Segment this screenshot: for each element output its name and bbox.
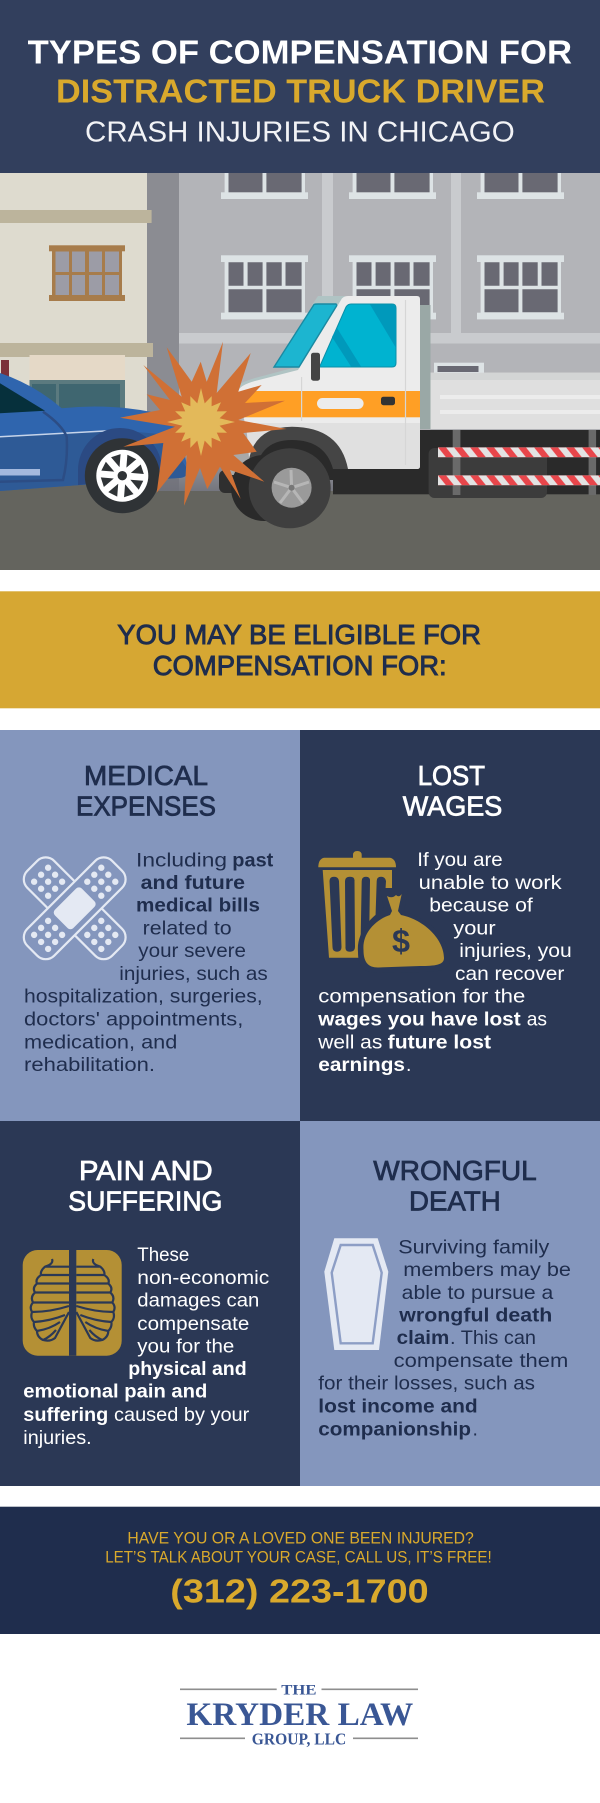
title line 3: CRASH INJURIES IN CHICAGO bbox=[85, 117, 515, 149]
side window bbox=[320, 304, 396, 367]
heading: lost wages: LOST bbox=[418, 760, 485, 791]
panel: lost wages bbox=[300, 730, 600, 1121]
icon: rib cage bbox=[23, 1250, 122, 1356]
heading: medical expenses bbox=[76, 760, 216, 822]
body text: wrongful death: for their losses, such as bbox=[318, 1373, 535, 1395]
call to action panel bbox=[0, 1507, 600, 1634]
body text: pain and suffering: injuries. bbox=[23, 1427, 92, 1449]
body text: pain and suffering: compensate bbox=[137, 1313, 249, 1335]
body text: lost wages: If you are bbox=[417, 849, 503, 871]
logo: the kryder law group: KRYDER LAW bbox=[186, 1697, 413, 1733]
upper windows bbox=[221, 173, 564, 199]
logo: the kryder law group: GROUP, LLC bbox=[252, 1729, 346, 1748]
body text: lost wages: unable to work bbox=[419, 872, 562, 894]
body text: wrongful death: . bbox=[472, 1418, 478, 1440]
heading: pain and suffering: PAIN AND bbox=[79, 1155, 213, 1186]
phone number: (312) 223-1700 bbox=[170, 1574, 429, 1611]
body text: lost wages: because of bbox=[429, 895, 533, 917]
call to action line 1: HAVE YOU OR A LOVED ONE BEEN INJURED? bbox=[127, 1529, 474, 1547]
banner line 1: YOU MAY BE ELIGIBLE FOR bbox=[117, 619, 481, 650]
body text: wrongful death: able to pursue a bbox=[402, 1282, 554, 1304]
body text: lost wages: earnings bbox=[318, 1054, 405, 1076]
car wheel bbox=[85, 438, 160, 513]
body text: lost wages bbox=[317, 849, 572, 1076]
body text: wrongful death: members may be bbox=[403, 1259, 571, 1281]
body text: pain and suffering: caused by your bbox=[114, 1404, 250, 1426]
body text: medical expenses: and future bbox=[141, 872, 245, 894]
body text: wrongful death: . This can bbox=[450, 1327, 536, 1349]
body text: pain and suffering: damages can bbox=[137, 1290, 259, 1312]
title line 2: DISTRACTED TRUCK DRIVER bbox=[56, 72, 545, 110]
body text: pain and suffering: physical and bbox=[128, 1358, 247, 1380]
panel: wrongful death bbox=[300, 1121, 600, 1486]
buildings background bbox=[0, 173, 600, 498]
body text: medical expenses: rehabilitation. bbox=[24, 1054, 155, 1076]
body text: lost wages: can recover bbox=[455, 963, 565, 985]
body text: lost wages: wages you have lost bbox=[317, 1009, 521, 1031]
body text: wrongful death: claim bbox=[397, 1327, 449, 1349]
body text: medical expenses: your severe bbox=[138, 940, 246, 962]
crash illustration bbox=[0, 173, 600, 570]
body text: pain and suffering: These bbox=[137, 1244, 189, 1266]
header panel bbox=[0, 0, 600, 173]
body text: lost wages: injuries, you bbox=[459, 940, 572, 962]
logo: the kryder law group: THE bbox=[281, 1682, 316, 1698]
icon: coffin bbox=[324, 1238, 388, 1350]
icon: trash can and money bag bbox=[318, 851, 450, 973]
heading: medical expenses: MEDICAL bbox=[84, 760, 208, 791]
body text: medical expenses: Including bbox=[136, 850, 227, 872]
body text: wrongful death: compensate them bbox=[394, 1350, 568, 1372]
body text: lost wages: compensation for the bbox=[318, 986, 525, 1008]
heading: wrongful death: DEATH bbox=[409, 1186, 501, 1217]
heading: wrongful death bbox=[373, 1155, 537, 1217]
heading: pain and suffering bbox=[68, 1155, 222, 1217]
windshield bbox=[274, 304, 337, 367]
heading: medical expenses: EXPENSES bbox=[76, 791, 216, 822]
body text: wrongful death bbox=[318, 1236, 571, 1440]
body text: medical expenses: medication, and bbox=[24, 1031, 177, 1053]
body text: lost wages: as bbox=[527, 1009, 547, 1031]
middle windows bbox=[221, 255, 564, 319]
icon: trash can and money bag: $ bbox=[392, 923, 410, 959]
body text: pain and suffering: you for the bbox=[137, 1335, 234, 1357]
body text: wrongful death: Surviving family bbox=[398, 1236, 550, 1258]
body text: lost wages: your bbox=[453, 917, 496, 939]
body text: pain and suffering: non-economic bbox=[137, 1267, 270, 1289]
panel: pain and suffering bbox=[0, 1121, 300, 1486]
body text: wrongful death: companionship bbox=[318, 1418, 471, 1440]
body text: pain and suffering: emotional pain and bbox=[23, 1381, 207, 1403]
heading: lost wages bbox=[403, 760, 502, 822]
truck cab bbox=[237, 296, 420, 469]
body text: lost wages: well as bbox=[317, 1031, 382, 1053]
body text: medical expenses: injuries, such as bbox=[119, 963, 268, 985]
front wheel bbox=[249, 448, 331, 528]
body text: medical expenses: hospitalization, surgeries, bbox=[24, 986, 263, 1008]
icon: bandage bbox=[19, 852, 131, 964]
body text: wrongful death: wrongful death bbox=[398, 1305, 552, 1327]
body text: lost wages: . bbox=[406, 1054, 411, 1076]
body text: pain and suffering: suffering bbox=[23, 1404, 108, 1426]
panel: medical expenses bbox=[0, 730, 300, 1121]
title line 1: TYPES OF COMPENSATION FOR bbox=[28, 33, 572, 70]
truck bbox=[219, 296, 600, 528]
blue car bbox=[0, 373, 188, 513]
heading: lost wages: WAGES bbox=[403, 791, 502, 822]
road bbox=[0, 470, 600, 570]
front wheel arch bbox=[248, 427, 348, 469]
body text: medical expenses: medical bills bbox=[136, 895, 260, 917]
body text: medical expenses bbox=[24, 850, 274, 1076]
body text: medical expenses: past bbox=[232, 850, 274, 872]
body text: wrongful death: lost income and bbox=[318, 1395, 478, 1417]
mirror bbox=[311, 353, 320, 381]
explosion bbox=[120, 342, 287, 506]
body text: medical expenses: related to bbox=[143, 917, 232, 939]
heading: wrongful death: WRONGFUL bbox=[373, 1155, 537, 1186]
eligibility banner bbox=[0, 591, 600, 708]
banner line 2: COMPENSATION FOR: bbox=[153, 650, 447, 681]
body text: pain and suffering bbox=[23, 1244, 270, 1449]
heading: pain and suffering: SUFFERING bbox=[68, 1186, 222, 1217]
call to action line 2: LET’S TALK ABOUT YOUR CASE, CALL US, IT’S FREE! bbox=[105, 1548, 492, 1566]
body text: medical expenses: doctors' appointments, bbox=[24, 1009, 243, 1031]
body text: lost wages: future lost bbox=[388, 1031, 492, 1053]
logo: the kryder law group bbox=[180, 1682, 418, 1748]
